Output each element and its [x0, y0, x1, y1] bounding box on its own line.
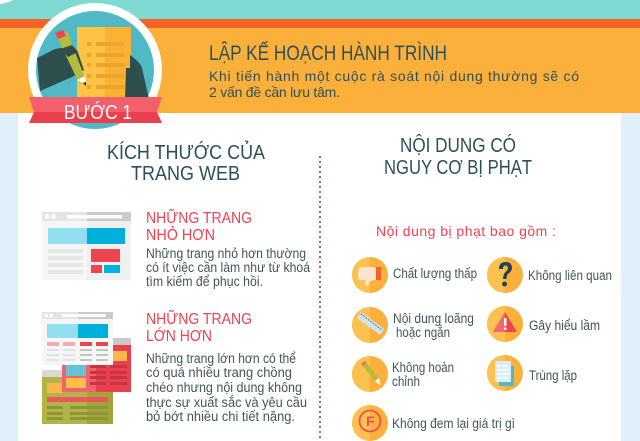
text block: smaller pages: NHỮNG TRANG — [146, 207, 252, 227]
item: thin or short content — [352, 307, 474, 343]
text block: smaller pages: có ít việc cần làm như từ khoá — [146, 260, 310, 275]
item: duplicate — [487, 355, 577, 391]
item: irrelevant — [487, 257, 612, 293]
text block: smaller pages — [146, 207, 310, 289]
item: incomplete: chỉnh — [392, 374, 420, 389]
column heading: risky content: NỘI DUNG CÓ — [400, 134, 516, 157]
item: duplicate: Trùng lặp — [529, 368, 577, 383]
text block: larger pages: NHỮNG TRANG — [146, 308, 252, 328]
text block: larger pages: thực sự xuất sắc và yêu cầu — [146, 395, 307, 410]
column heading: page size: TRANG WEB — [131, 163, 240, 185]
item: no value: F — [366, 413, 375, 429]
text block: smaller pages: Những trang nhỏ hơn thường — [146, 246, 306, 261]
item: misleading: Gây hiểu lầm — [529, 318, 600, 333]
column heading: risky content — [384, 134, 532, 179]
ribbon label: BƯỚC 1 — [64, 101, 132, 124]
badge: step 1 — [28, 3, 162, 137]
item: incomplete — [352, 356, 454, 392]
item: low quality — [352, 257, 477, 293]
column heading: page size — [107, 140, 266, 185]
text block: larger pages: chéo nhưng nội dung không — [146, 380, 302, 395]
icon: right hand — [125, 55, 149, 99]
header text — [209, 40, 579, 100]
heading: LẬP KẾ HOẠCH HÀNH TRÌNH — [209, 40, 447, 65]
icon: left hand with pencil — [37, 30, 86, 91]
text block: larger pages: LỚN HƠN — [146, 326, 212, 345]
subheading: penalised content: Nội dung bị phạt bao gồm : — [376, 223, 556, 239]
item: misleading — [487, 306, 600, 342]
text block: larger pages — [146, 308, 307, 424]
item: thin or short content: Nội dung loãng — [393, 311, 474, 326]
intro text: Khi tiến hành một cuộc rà soát nội dung thường sẽ có — [209, 68, 579, 84]
icon: small web page — [42, 212, 131, 280]
text block: larger pages: bỏ bớt nhiều chi tiết nặng. — [146, 409, 295, 424]
item: thin or short content: hoặc ngắn — [396, 325, 450, 340]
text block: smaller pages: NHỎ HƠN — [146, 225, 215, 244]
icon: checklist paper — [77, 27, 131, 102]
item: no value — [352, 405, 515, 441]
intro text: 2 vấn đề cần lưu tâm. — [209, 84, 340, 100]
item: incomplete: Không hoàn — [392, 360, 454, 375]
text block: larger pages: có quá nhiều trang chồng — [146, 365, 292, 380]
intro text — [209, 68, 579, 100]
text block: larger pages: Những trang lớn hơn có thể — [146, 351, 296, 366]
column heading: risky content: NGUY CƠ BỊ PHẠT — [384, 157, 532, 179]
column heading: page size: KÍCH THƯỚC CỦA — [107, 140, 266, 164]
icon: larger stacked web pages — [42, 312, 131, 424]
item: irrelevant: Không liên quan — [528, 268, 612, 283]
item: low quality: Chất lượng thấp — [393, 266, 477, 281]
text block: smaller pages: tìm kiếm để phục hồi. — [146, 274, 263, 289]
item: no value: Không đem lại giá trị gì — [392, 416, 515, 431]
